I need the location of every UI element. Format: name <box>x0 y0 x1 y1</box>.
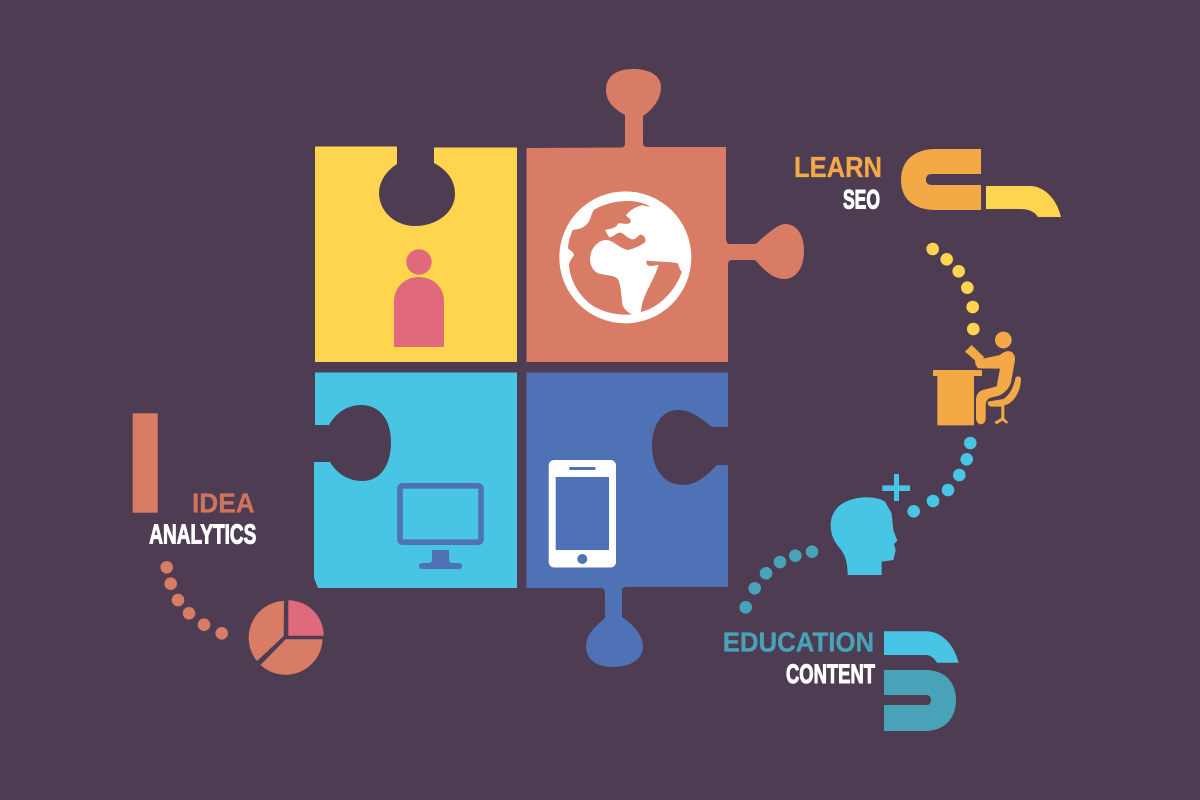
heading: education content <box>723 627 875 689</box>
dotted path: teal <box>739 545 818 614</box>
icon: person <box>394 249 444 347</box>
heading: education content: EDUCATION <box>723 627 874 658</box>
puzzle piece: yellow with person <box>315 146 517 362</box>
icon: pie chart <box>249 600 324 675</box>
letter shape: cyan and teal D <box>884 631 959 731</box>
icon: person reading at desk <box>933 332 1021 425</box>
icon: monitor <box>400 486 481 569</box>
puzzle piece: cyan with monitor <box>314 372 517 588</box>
heading: learn seo: LEARN <box>794 152 882 184</box>
heading: idea analytics: IDEA <box>192 488 255 519</box>
icon: globe <box>559 191 691 323</box>
heading: learn seo <box>794 152 882 214</box>
puzzle piece: orange with globe <box>526 69 804 362</box>
heading: education content: CONTENT <box>786 659 875 689</box>
dotted path: orange <box>160 561 228 640</box>
heading: learn seo: SEO <box>843 184 880 214</box>
dotted path: yellow <box>926 243 980 335</box>
letter shape: orange I <box>133 413 158 513</box>
heading: idea analytics <box>149 488 256 550</box>
icon: head with plus <box>831 474 910 575</box>
puzzle piece: blue with phone <box>526 372 728 667</box>
letter shape: orange and yellow L <box>901 149 1061 217</box>
icon: smartphone <box>549 460 616 568</box>
dotted path: cyan <box>907 437 977 518</box>
heading: idea analytics: ANALYTICS <box>149 519 256 550</box>
